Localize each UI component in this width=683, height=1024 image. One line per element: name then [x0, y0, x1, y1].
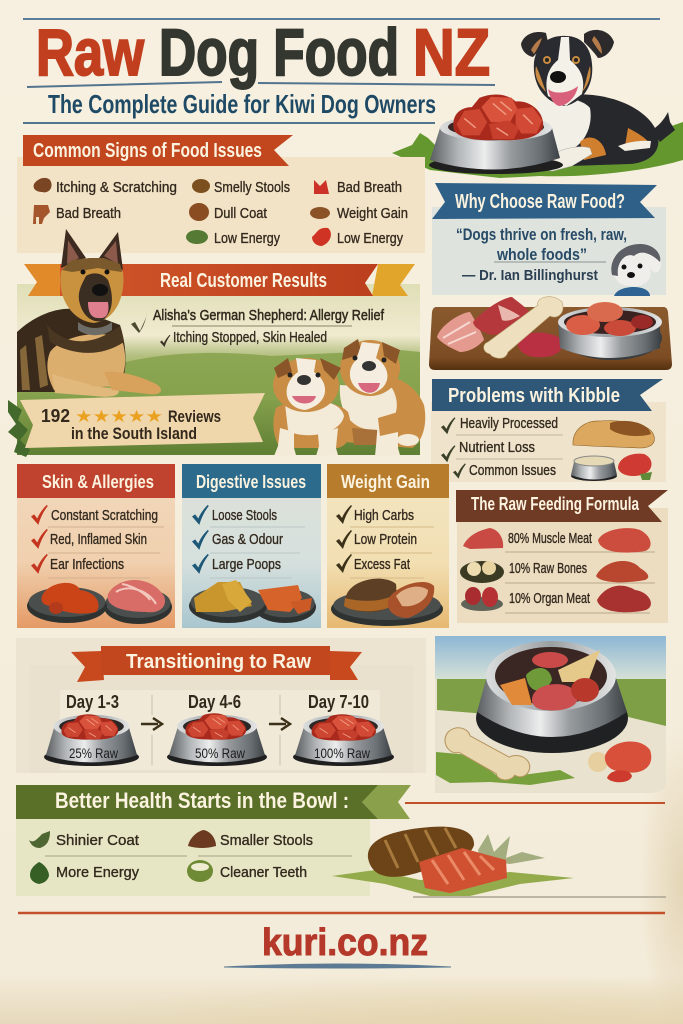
banner: results: Real Customer Results — [160, 270, 327, 292]
step: day 1-3: Day 1-3 — [66, 692, 119, 712]
testimonial: Alisha's German Shepherd: Allergy Relief — [153, 307, 385, 324]
kibble list: Nutrient Loss — [459, 439, 535, 456]
kibble list: Common Issues — [469, 462, 556, 479]
benefits: Cleaner Teeth — [220, 864, 307, 881]
quote: “Dogs thrive on fresh, raw, — [456, 225, 627, 244]
bulldogs — [273, 339, 425, 456]
step: day 4-6: 50% Raw — [195, 745, 246, 761]
step: day 7-10: Day 7-10 — [308, 692, 369, 712]
cutting board with raw meats — [429, 297, 672, 370]
quote — [456, 225, 627, 284]
bone — [484, 297, 563, 358]
testimonial — [131, 307, 385, 347]
step: day 4-6 — [167, 692, 267, 766]
banner: better health — [16, 785, 411, 819]
sign icons — [33, 178, 331, 246]
signs list: Low Energy — [337, 230, 403, 247]
kibble images — [571, 421, 654, 481]
formula rows: 10% Organ Meat — [509, 590, 591, 607]
right bulldog — [340, 339, 425, 456]
panel: skin and allergies: Ear Infections — [50, 556, 124, 573]
signs list: Bad Breath — [337, 179, 402, 196]
banner: why raw — [432, 183, 657, 219]
panel: digestive issues: Gas & Odour — [212, 531, 283, 548]
weight gain plate — [331, 579, 443, 626]
testimonial: Itching Stopped, Skin Healed — [173, 329, 327, 346]
title: Raw Dog Food NZ — [36, 15, 490, 89]
meat chunks — [588, 741, 651, 782]
picture: bowl on grass — [435, 636, 666, 793]
arrow 1 — [141, 718, 162, 730]
large bowl — [476, 641, 628, 753]
benefits: Shinier Coat — [56, 832, 140, 849]
panel: common signs of food issues — [17, 135, 425, 253]
banner: kibble: Problems with Kibble — [448, 385, 620, 407]
benefits — [29, 830, 352, 884]
kibble list: Heavily Processed — [460, 415, 558, 432]
quote: — Dr. Ian Billinghurst — [462, 267, 598, 284]
title: Raw Dog Food NZ: Dog Food — [159, 15, 399, 89]
step: day 4-6: Day 4-6 — [188, 692, 241, 712]
website url: kuri.co.nz — [262, 922, 428, 964]
quote: whole foods” — [496, 245, 587, 264]
left bulldog — [273, 358, 351, 456]
banner: kibble — [432, 379, 663, 411]
panel: skin and allergies: Red, Inflamed Skin — [50, 531, 147, 548]
benefits: Smaller Stools — [220, 832, 313, 849]
icon: small dog — [611, 244, 661, 296]
banner: transitioning — [71, 646, 362, 682]
panel: digestive issues: Digestive Issues — [196, 472, 306, 492]
formula rows: 80% Muscle Meat — [508, 530, 593, 547]
panel: digestive issues — [182, 464, 321, 628]
title block — [23, 15, 660, 123]
benefits: More Energy — [56, 864, 139, 881]
signs list — [56, 179, 408, 247]
formula rows — [460, 528, 655, 613]
step: day 7-10 — [293, 692, 394, 766]
panel: skin and allergies: Constant Scratching — [51, 507, 158, 524]
reviews ribbon: in the South Island — [71, 424, 197, 443]
panel: digestive issues: Loose Stools — [212, 507, 277, 524]
panel: weight gain: Excess Fat — [354, 556, 411, 573]
banner: formula — [456, 490, 668, 522]
panel: transitioning to raw — [16, 638, 426, 773]
formula rows: 10% Raw Bones — [509, 560, 587, 577]
panel: real customer results — [8, 229, 425, 457]
signs list: Smelly Stools — [214, 179, 290, 196]
step: day 1-3: 25% Raw — [69, 745, 119, 761]
panel: weight gain: Weight Gain — [341, 472, 430, 492]
panel: digestive issues: Large Poops — [212, 556, 281, 573]
bowl of meat — [558, 302, 662, 360]
banner: why raw: Why Choose Raw Food? — [455, 191, 625, 213]
step: day 1-3 — [44, 692, 139, 766]
panel: weight gain: High Carbs — [354, 507, 414, 524]
reviews ribbon: 192 — [41, 406, 70, 426]
signs list: Itching & Scratching — [56, 179, 177, 196]
panel: weight gain — [327, 464, 449, 628]
banner: results — [24, 264, 415, 296]
german shepherd — [17, 229, 161, 397]
signs list: Bad Breath — [56, 205, 121, 222]
kibble list — [441, 415, 563, 479]
panel: better health — [16, 785, 411, 896]
signs list: Weight Gain — [337, 205, 408, 222]
subtitle: The Complete Guide for Kiwi Dog Owners — [48, 89, 436, 119]
banner: better health: Better Health Starts in the Bowl : — [55, 788, 349, 813]
reviews ribbon — [20, 393, 265, 448]
arrow 2 — [269, 718, 290, 730]
grass — [436, 752, 575, 785]
signs list: Low Energy — [214, 230, 280, 247]
panel: skin and allergies: Skin & Allergies — [42, 472, 154, 492]
title: Raw Dog Food NZ: Raw — [36, 15, 145, 89]
food: sausage and meat on grass — [332, 827, 574, 896]
panel: why choose raw food — [432, 183, 666, 296]
step: day 7-10: 100% Raw — [314, 745, 371, 761]
banner: common signs: Common Signs of Food Issues — [33, 140, 262, 162]
panel: skin and allergies — [17, 464, 175, 628]
digestive plates — [189, 580, 316, 623]
panel: weight gain: Low Protein — [354, 531, 417, 548]
banner: transitioning: Transitioning to Raw — [126, 651, 311, 673]
signs list: Dull Coat — [214, 205, 268, 222]
skin plates — [27, 580, 172, 624]
hero: tricolour dog with bowl — [392, 30, 683, 178]
reviews ribbon: ★★★★★ — [75, 407, 163, 426]
banner: common signs — [23, 135, 293, 166]
title: Raw Dog Food NZ: NZ — [413, 15, 490, 89]
reviews ribbon: Reviews — [168, 407, 221, 426]
panel: raw feeding formula — [456, 490, 668, 623]
bone — [445, 728, 530, 780]
panel: problems with kibble — [431, 379, 666, 482]
